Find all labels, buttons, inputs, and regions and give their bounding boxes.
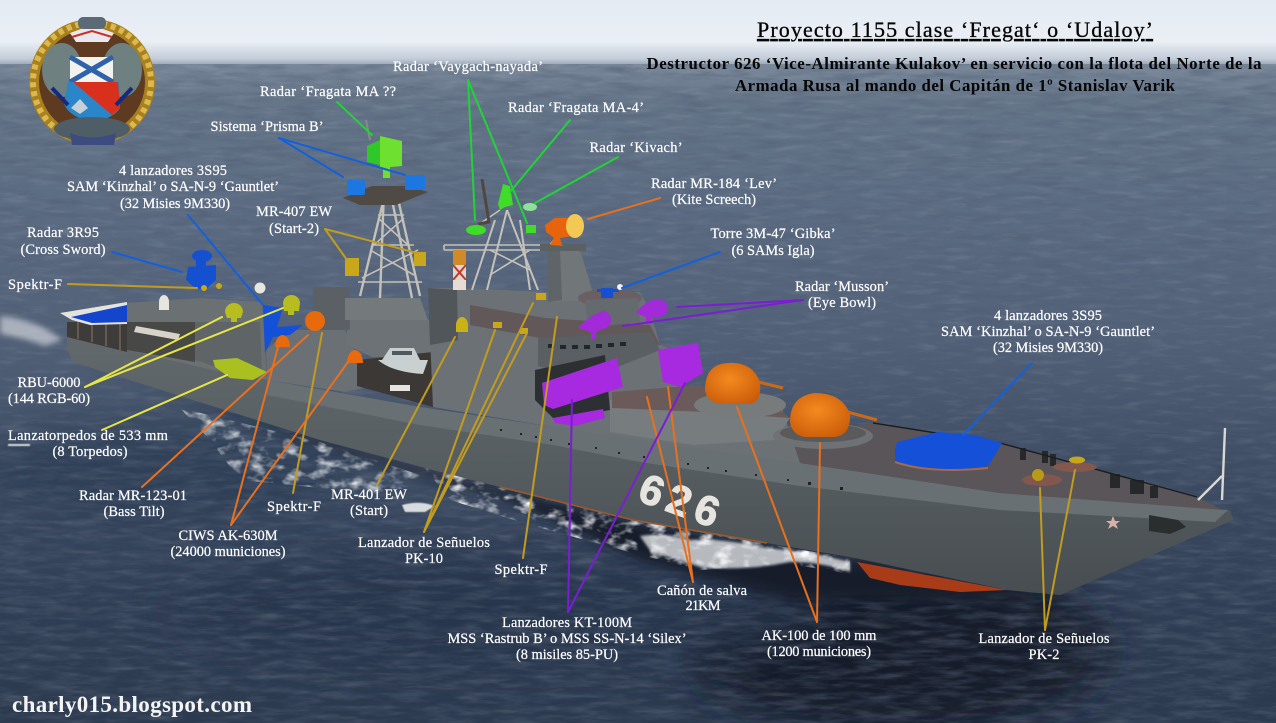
label: Fragata MA-4: Radar ‘Fragata MA-4’: [508, 100, 644, 116]
purple leaders: [568, 300, 803, 612]
forward mast: [444, 179, 560, 290]
signal flags: [453, 250, 466, 290]
green forward radars: [466, 184, 537, 235]
portholes: [500, 429, 843, 490]
label: MR-401: [331, 487, 407, 519]
label: MR-407 EW: (Start-2): [269, 221, 319, 237]
subtitle: Destructor 626 ‘Vice-Almirante Kulakov’ en servicio con la flota del Norte de la: [646, 54, 1262, 73]
label: RBU-6000: (144 RGB-60): [8, 391, 90, 407]
label: CIWS: CIWS AK-630M: [178, 528, 278, 544]
label: Cañón de salva: Cañón de salva: [657, 583, 748, 599]
label: MR-401: MR-401 EW: [331, 487, 407, 503]
Prisma blue cylinders: [347, 175, 425, 195]
Kinzhal launcher forward: [895, 432, 1002, 470]
label: Kinzhal forward: (32 Misies 9M330): [993, 340, 1103, 356]
label: Kinzhal forward: [941, 308, 1155, 356]
label: Spektr-F forward: Spektr-F: [494, 562, 548, 578]
PK-2 launchers: [1022, 456, 1097, 486]
label: Radar 3R95: (Cross Sword): [20, 242, 106, 258]
ship: [60, 120, 1233, 595]
label: PK-10: Lanzador de Señuelos: [358, 535, 490, 551]
label: PK-10: [358, 535, 490, 567]
ship's boat: [378, 348, 428, 374]
label: Kinzhal forward: 4 lanzadores 3S95: [994, 308, 1102, 324]
hull: [67, 337, 1233, 595]
AK-630 mounts: [275, 311, 363, 363]
boat recess: [357, 352, 433, 407]
label: Lanzatorpedos: Lanzatorpedos de 533 mm: [8, 428, 168, 444]
AK-100 turret aft: [694, 363, 786, 418]
AK-100 turret forward: [773, 393, 877, 449]
label: Kinzhal forward: SAM ‘Kinzhal’ o SA-N-9 ‘Gauntlet’: [941, 324, 1155, 340]
aft mast: [358, 120, 422, 298]
label: RBU-6000: RBU-6000: [18, 375, 80, 391]
label: Kivach: Radar ‘Kivach’: [590, 140, 682, 156]
KT-100M purple launchers: [542, 343, 703, 426]
label: MR-123: Radar MR-123-01: [79, 488, 187, 504]
Spektr and start yellow boxes: [201, 252, 546, 334]
forward deck house: [610, 392, 790, 445]
subtitle: Armada Rusa al mando del Capitán de 1º Stanislav Varik: [735, 76, 1176, 95]
red boot topping: [857, 562, 1007, 592]
label: Radar 3R95: [20, 225, 106, 258]
label: Spektr-F aft: Spektr-F: [8, 277, 62, 293]
foredeck fittings: [1020, 448, 1158, 498]
label: Torre Gibka: (6 SAMs Igla): [732, 243, 815, 259]
label: Radar Fragata MA: Radar ‘Fragata MA ??: [260, 84, 396, 100]
white stores: [390, 385, 410, 391]
label: MR-184 Lev: [651, 176, 777, 208]
label: AK-100: [762, 628, 876, 660]
title block: [646, 17, 1262, 95]
label: CIWS: (24000 municiones): [170, 544, 286, 560]
label: RBU-6000: [8, 375, 90, 407]
label: Lanzatorpedos: [8, 428, 168, 460]
label: Kinzhal aft: [67, 163, 279, 212]
bridge windows: [548, 342, 626, 349]
label: Radar 3R95: Radar 3R95: [27, 225, 99, 241]
label: Vaygach: Radar ‘Vaygach-nayada’: [393, 59, 543, 75]
label: Lanzatorpedos: (8 Torpedos): [52, 444, 128, 460]
Gibka launcher: [597, 288, 619, 298]
callout leader lines: [68, 80, 1075, 630]
label: MR-401: (Start): [350, 503, 388, 519]
label: KT-100M: (8 misiles 85-PU): [516, 647, 618, 663]
label: KT-100M: Lanzadores KT-100M: [502, 615, 632, 631]
label: MR-184 Lev: (Kite Screech): [672, 192, 756, 208]
label: Kinzhal aft: SAM ‘Kinzhal’ o SA-N-9 ‘Gauntlet’: [67, 179, 279, 195]
forward block: [428, 288, 800, 463]
foredeck: [773, 423, 1223, 510]
website credit: charly015.blogspot.com: [12, 692, 252, 717]
orange leaders: [142, 198, 820, 622]
main title: Proyecto 1155 clase ‘Fregat‘ o ‘Udaloy’: [757, 17, 1153, 42]
label: Musson: (Eye Bowl): [808, 295, 876, 311]
label: Musson: [795, 279, 889, 311]
label: MR-407 EW: MR-407 EW: [256, 204, 332, 220]
emblem shield: [64, 57, 120, 122]
subtitle: [646, 54, 1262, 95]
label: PK-2: PK-2: [1028, 647, 1060, 663]
label: KT-100M: [448, 615, 686, 663]
label: Kinzhal aft: (32 Misies 9M330): [120, 196, 230, 212]
radar 3R95 Cross Sword: [186, 250, 216, 290]
green radar leaders: [337, 80, 618, 223]
Fragata radar green antenna: [367, 136, 402, 178]
centre block: [266, 330, 378, 392]
gold leaders: [68, 229, 1075, 630]
gibka platform: [578, 289, 642, 307]
label: Sistema Prisma B: Sistema ‘Prisma B’: [210, 119, 324, 135]
helipad: [60, 302, 127, 325]
callout labels: [8, 59, 1155, 663]
Musson purple radars: [578, 299, 668, 339]
Kinzhal launcher aft: [263, 305, 303, 353]
bow staff: [1198, 428, 1225, 500]
label: CIWS: [170, 528, 286, 560]
stern cabin: [67, 322, 127, 352]
yellow leaders: [85, 308, 283, 430]
white dome near Gibka: [617, 284, 623, 290]
label: KT-100M: MSS ‘Rastrub B’ o MSS SS-N-14 ‘Silex’: [448, 631, 686, 647]
label: AK-100: AK-100 de 100 mm: [762, 628, 876, 644]
hull upper band: [267, 380, 1228, 522]
label: MR-123: [79, 488, 187, 520]
hull number 626: 626: [633, 464, 726, 537]
label: MR-184 Lev: Radar MR-184 ‘Lev’: [651, 176, 777, 192]
label: Torre Gibka: [710, 226, 836, 259]
radar tower: [547, 250, 598, 302]
anchor: [1149, 515, 1186, 534]
aft hangar block: [127, 298, 267, 380]
label: Cañón de salva: 21KM: [686, 598, 721, 614]
torpedo launcher: [213, 358, 267, 380]
label: Torre Gibka: Torre 3M-47 ‘Gibka’: [710, 226, 836, 242]
label: Cañón de salva: [657, 583, 748, 614]
red star: [1106, 516, 1120, 529]
label: PK-2: [978, 631, 1110, 663]
label: MR-123: (Bass Tilt): [104, 504, 165, 520]
blue leaders: [112, 138, 1032, 435]
Lev orange radar with dish: [545, 214, 584, 246]
aft domes: [159, 282, 266, 310]
emblem: Russian naval coat of arms: [29, 17, 155, 145]
label: Musson: Radar ‘Musson’: [795, 279, 889, 295]
label: MR-407 EW: [256, 204, 332, 237]
label: PK-2: Lanzador de Señuelos: [978, 631, 1110, 647]
label: Kinzhal aft: 4 lanzadores 3S95: [119, 163, 227, 179]
dark recess below launcher: [535, 355, 610, 420]
RBU-6000 domes: [225, 295, 300, 322]
label: AK-100: (1200 municiones): [767, 644, 871, 660]
label: PK-10: PK-10: [405, 551, 443, 567]
aft mast platform: [343, 186, 428, 205]
label: Spektr-F mid: Spektr-F: [267, 499, 321, 515]
life rafts: [134, 326, 180, 340]
